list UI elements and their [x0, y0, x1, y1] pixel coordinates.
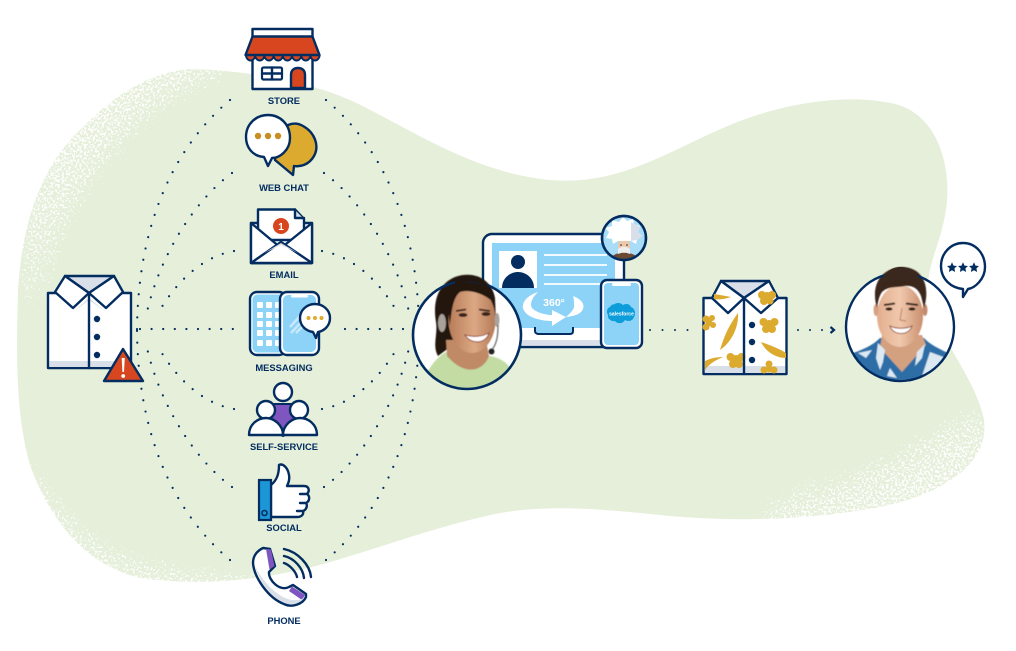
- 360 degree arrow: 360°: [543, 297, 565, 309]
- channel: email: [251, 210, 312, 280]
- channel: messaging: [250, 292, 330, 373]
- channel: web chat: [246, 115, 316, 193]
- channel: phone: [253, 548, 311, 626]
- arrow: shirt to customer: [798, 327, 834, 333]
- icon: mascot badge: [602, 216, 646, 261]
- label: phone: PHONE: [267, 615, 301, 626]
- dotted connector to shirt: [650, 329, 690, 331]
- channel: social: [259, 465, 309, 533]
- label: email: EMAIL: [269, 269, 299, 280]
- icon: warning triangle: [104, 349, 143, 381]
- salesforce cloud logo: salesforce: [609, 312, 634, 318]
- channel: store: [246, 29, 320, 106]
- customer card: [499, 251, 537, 288]
- label: self-service: SELF-SERVICE: [250, 441, 318, 452]
- background blob: [17, 69, 984, 582]
- dotted connectors: problem shirt to channels to agent: [137, 100, 419, 560]
- photo: happy customer: [845, 267, 958, 381]
- photo: support agent: [412, 274, 522, 390]
- icon: phone with salesforce logo: [601, 280, 642, 348]
- label: store: STORE: [268, 95, 300, 106]
- channel: email: 1: [278, 222, 284, 233]
- channel: self-service: [249, 383, 318, 452]
- icon: hawaiian shirt: [702, 281, 786, 374]
- label: messaging: MESSAGING: [255, 362, 313, 373]
- 360 degree arrow: [523, 292, 584, 326]
- label: social: SOCIAL: [266, 522, 302, 533]
- label: web chat: WEB CHAT: [259, 182, 309, 193]
- icon: shirt with warning: [48, 276, 143, 381]
- laptop with customer 360 view: [483, 234, 624, 347]
- icon: rating speech bubble: [941, 243, 985, 297]
